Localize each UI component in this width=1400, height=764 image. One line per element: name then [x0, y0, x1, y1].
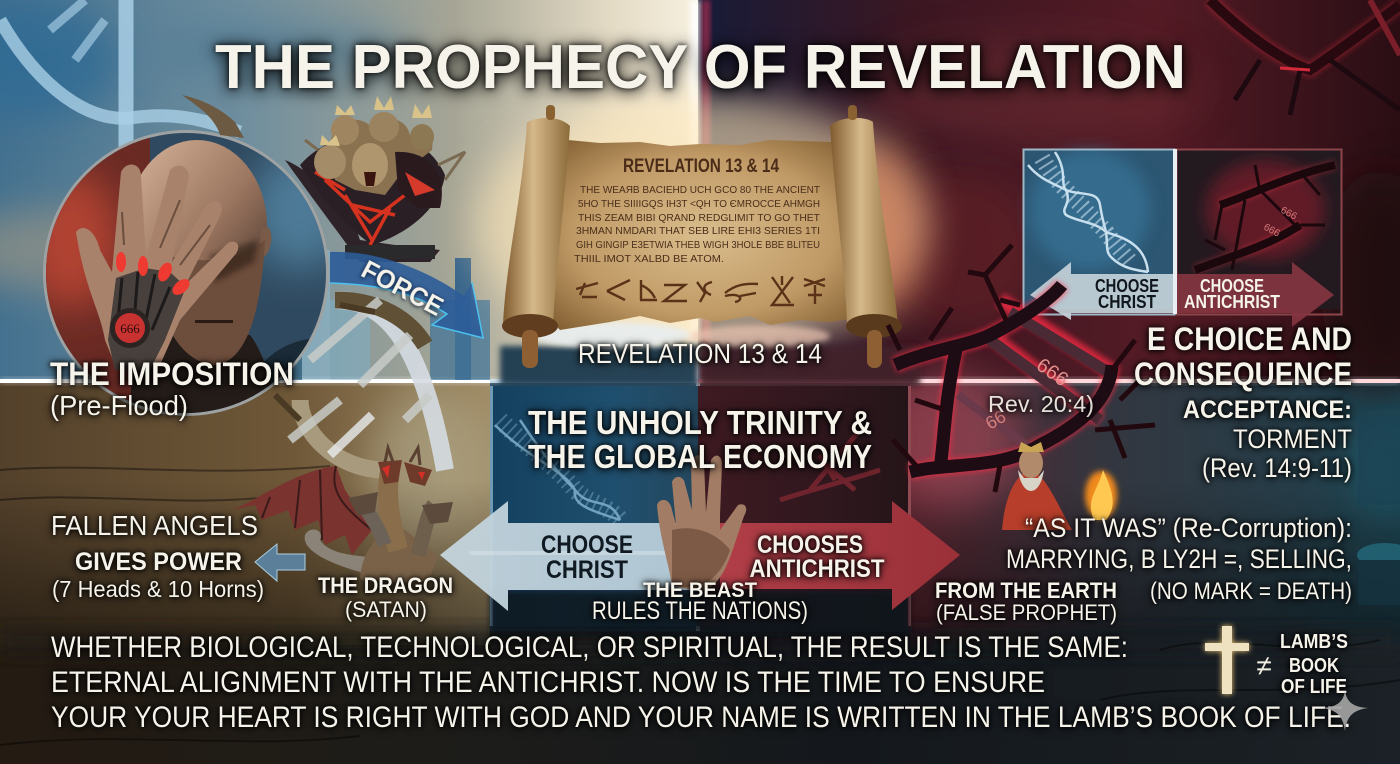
arrow: chooses antichrist: CHOOSES: [757, 531, 863, 559]
arrow: gives power: [255, 544, 305, 581]
icon: corrupted DNA helix: [275, 300, 445, 470]
arrow: choose christ: CHRIST: [546, 556, 628, 584]
section title: the unholy trinity: THE UNHOLY TRINITY &: [528, 404, 872, 441]
text block: as it was: “AS IT WAS” (Re-Corruption):: [1025, 513, 1352, 543]
icon: seven-headed beast: [182, 95, 465, 262]
scroll body text: 5HO THE SIIIIGQS IH3T <QH TO ЄMROCCE AHMGH: [578, 198, 820, 210]
label: from the earth: [935, 578, 1117, 625]
icon: faint DNA helix: [495, 420, 622, 522]
text block: acceptance: ACCEPTANCE:: [1183, 396, 1352, 424]
icon: right scroll roller: [830, 105, 902, 368]
scroll body text: THE WEAЯB BACIEHD UCH GCO 80 THE ANCIENT: [580, 184, 821, 196]
label: the dragon: [318, 573, 453, 622]
city right: [1357, 415, 1400, 605]
icon: faint thorned DNA: [780, 430, 880, 500]
label: lamb's book of life: BOOK: [1289, 655, 1339, 677]
closing statement: ETERNAL ALIGNMENT WITH THE ANTICHRIST. NOW IS THE TIME TO ENSURE: [51, 666, 1045, 699]
scroll body text: THIIL IMOT XALBD BE ATOM.: [574, 253, 724, 265]
icon: sparkle: [1322, 691, 1368, 731]
arrow: choose christ: [440, 501, 690, 611]
icon: ancient symbols row: [576, 276, 825, 305]
text block: revelation 20 reference: Rev. 20:4): [988, 391, 1094, 417]
icon: left scroll roller: [502, 105, 570, 368]
icon: flame: [1085, 470, 1117, 520]
horizontal light band: [0, 378, 1400, 384]
scroll body text: [574, 184, 821, 265]
arrow: chooses antichrist: [720, 501, 960, 610]
arrow: choose antichrist small: ANTICHRIST: [1184, 292, 1280, 312]
text block: fallen angels: (7 Heads & 10 Horns): [52, 576, 264, 602]
caption: revelation 13 and 14: REVELATION 13 & 14: [578, 338, 822, 369]
scroll heading: REVELATION 13 & 14: [623, 156, 779, 177]
label: the beast: THE BEAST: [643, 579, 757, 602]
label: the imposition: (Pre-Flood): [50, 390, 188, 421]
icon: thorned DNA with 666: 66: [982, 406, 1009, 433]
panel: the imposition portrait: [43, 130, 329, 416]
label: lamb's book of life: LAMB’S: [1280, 631, 1348, 653]
icon: thorned DNA with 666: [1195, 165, 1335, 270]
side heading: the choice and consequence: CONSEQUENCE: [1134, 356, 1352, 392]
label: the dragon: THE DRAGON: [318, 573, 453, 598]
label: the beast: [592, 579, 808, 625]
label: lamb's book of life: [1280, 631, 1348, 698]
icon: robed false prophet: [1002, 442, 1072, 530]
scroll body text: THIS ZEAM BIBI QRAND REDGLIMIT TO GO THET: [578, 212, 821, 224]
arrow: choose christ small: [1030, 262, 1173, 320]
icon: thorned DNA with 666: [888, 245, 1155, 492]
side heading: the choice and consequence: E CHOICE AND: [1147, 321, 1352, 357]
side heading: the choice and consequence: [1134, 321, 1352, 392]
arrow: choose christ small: CHRIST: [1098, 292, 1156, 312]
not-equal sign: ≠: [1256, 650, 1272, 681]
text block: as it was: (NO MARK = DEATH): [1150, 578, 1352, 605]
icon: mechanical hand with 666 seal: 666: [120, 321, 140, 336]
icon: thorned DNA corner: [1210, 0, 1400, 115]
label: from the earth: (FALSE PROPHET): [936, 600, 1117, 625]
arrow: force: [330, 252, 483, 338]
panel: choice and consequence images: [1023, 149, 1342, 327]
panel: unholy trinity backdrop: [490, 386, 911, 634]
main title: THE PROPHECY OF REVELATION: [215, 33, 1186, 102]
label: the imposition: THE IMPOSITION: [50, 356, 294, 392]
text block: fallen angels: [51, 510, 264, 602]
arrow: choose antichrist small: CHOOSE: [1200, 276, 1264, 296]
icon: three-headed winged dragon: [233, 448, 453, 582]
force label: FORCE: [357, 254, 448, 322]
icon: cross: [1205, 626, 1249, 694]
closing statement: WHETHER BIOLOGICAL, TECHNOLOGICAL, OR SPIRITUAL, THE RESULT IS THE SAME:: [51, 631, 1128, 664]
text block: acceptance: TORMENT: [1233, 424, 1352, 454]
icon: thorned DNA with 666: 666: [1262, 222, 1282, 240]
icon: thorned DNA with 666: 666: [1279, 205, 1299, 223]
scroll body text: 3HMAN NMDARI THAT SEB LIRE EHI3 SERIES 1TI: [576, 225, 820, 237]
icon: raised hand: [657, 455, 746, 592]
label: the beast: RULES THE NATIONS): [592, 597, 808, 625]
label: lamb's book of life: OF LIFE: [1281, 676, 1347, 698]
scroll body text: GIH GINGIP E3ETWIA THEB WIGH 3HOLE BBE BLITEU: [576, 239, 820, 251]
arrow: chooses antichrist: ANTICHRIST: [750, 555, 884, 583]
icon: clean DNA helix: [1028, 152, 1148, 272]
text block: fallen angels: FALLEN ANGELS: [51, 510, 258, 541]
label: the imposition: [50, 356, 294, 421]
arrow: choose antichrist small: [1177, 262, 1334, 327]
panel: parchment scroll: [502, 105, 902, 368]
icon: mechanical hand with 666 seal: [76, 164, 238, 370]
section title: the unholy trinity: [528, 404, 872, 475]
text block: as it was: [1006, 513, 1352, 605]
city skyline: [262, 250, 490, 380]
text block: acceptance: (Rev. 14:9-11): [1202, 453, 1352, 483]
centre vertical light beam: [690, 0, 710, 631]
arrow: choose christ small: CHOOSE: [1095, 276, 1159, 296]
closing statement: [51, 631, 1351, 734]
text block: fallen angels: GIVES POWER: [75, 548, 242, 576]
label: the dragon: (SATAN): [345, 597, 427, 622]
section title: the unholy trinity: THE GLOBAL ECONOMY: [528, 438, 872, 475]
label: from the earth: FROM THE EARTH: [935, 578, 1117, 603]
glow behind scroll: [475, 95, 925, 386]
text block: acceptance: [1183, 396, 1352, 483]
icon: thorned DNA with 666: 666: [1032, 354, 1072, 391]
icon: DNA helix top-left: [0, 0, 240, 150]
arrow: choose christ: CHOOSE: [541, 531, 633, 559]
